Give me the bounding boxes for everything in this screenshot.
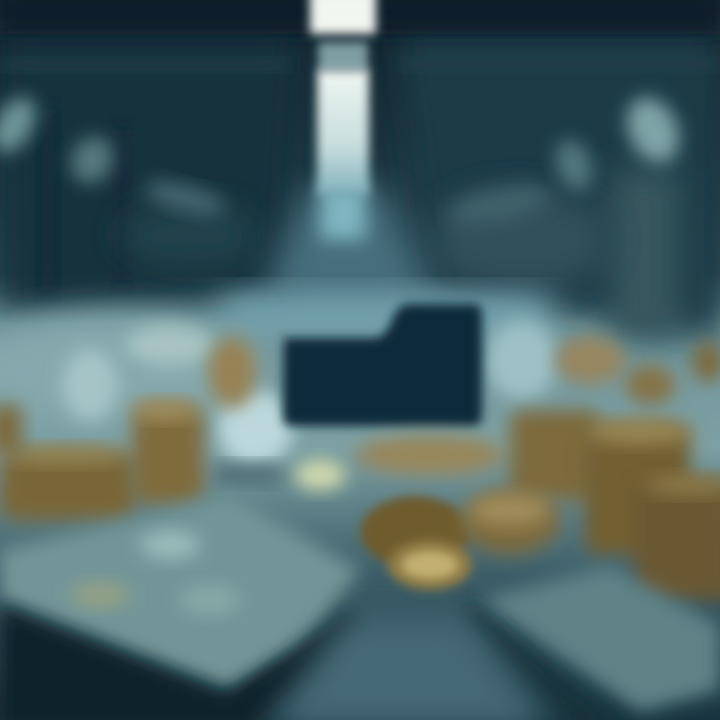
- floor glow: [0, 295, 558, 490]
- left gold coin stacks: [0, 336, 256, 520]
- right gold coin stacks: [355, 336, 720, 600]
- right ledger on table: [465, 565, 720, 720]
- center gold coins: [360, 490, 560, 590]
- ceiling and walls: [0, 0, 720, 340]
- left ledger on table: [0, 495, 365, 720]
- wall lights: [0, 89, 689, 231]
- table floor: [265, 615, 555, 720]
- folder icon: [283, 304, 482, 426]
- light beam: [260, 0, 430, 300]
